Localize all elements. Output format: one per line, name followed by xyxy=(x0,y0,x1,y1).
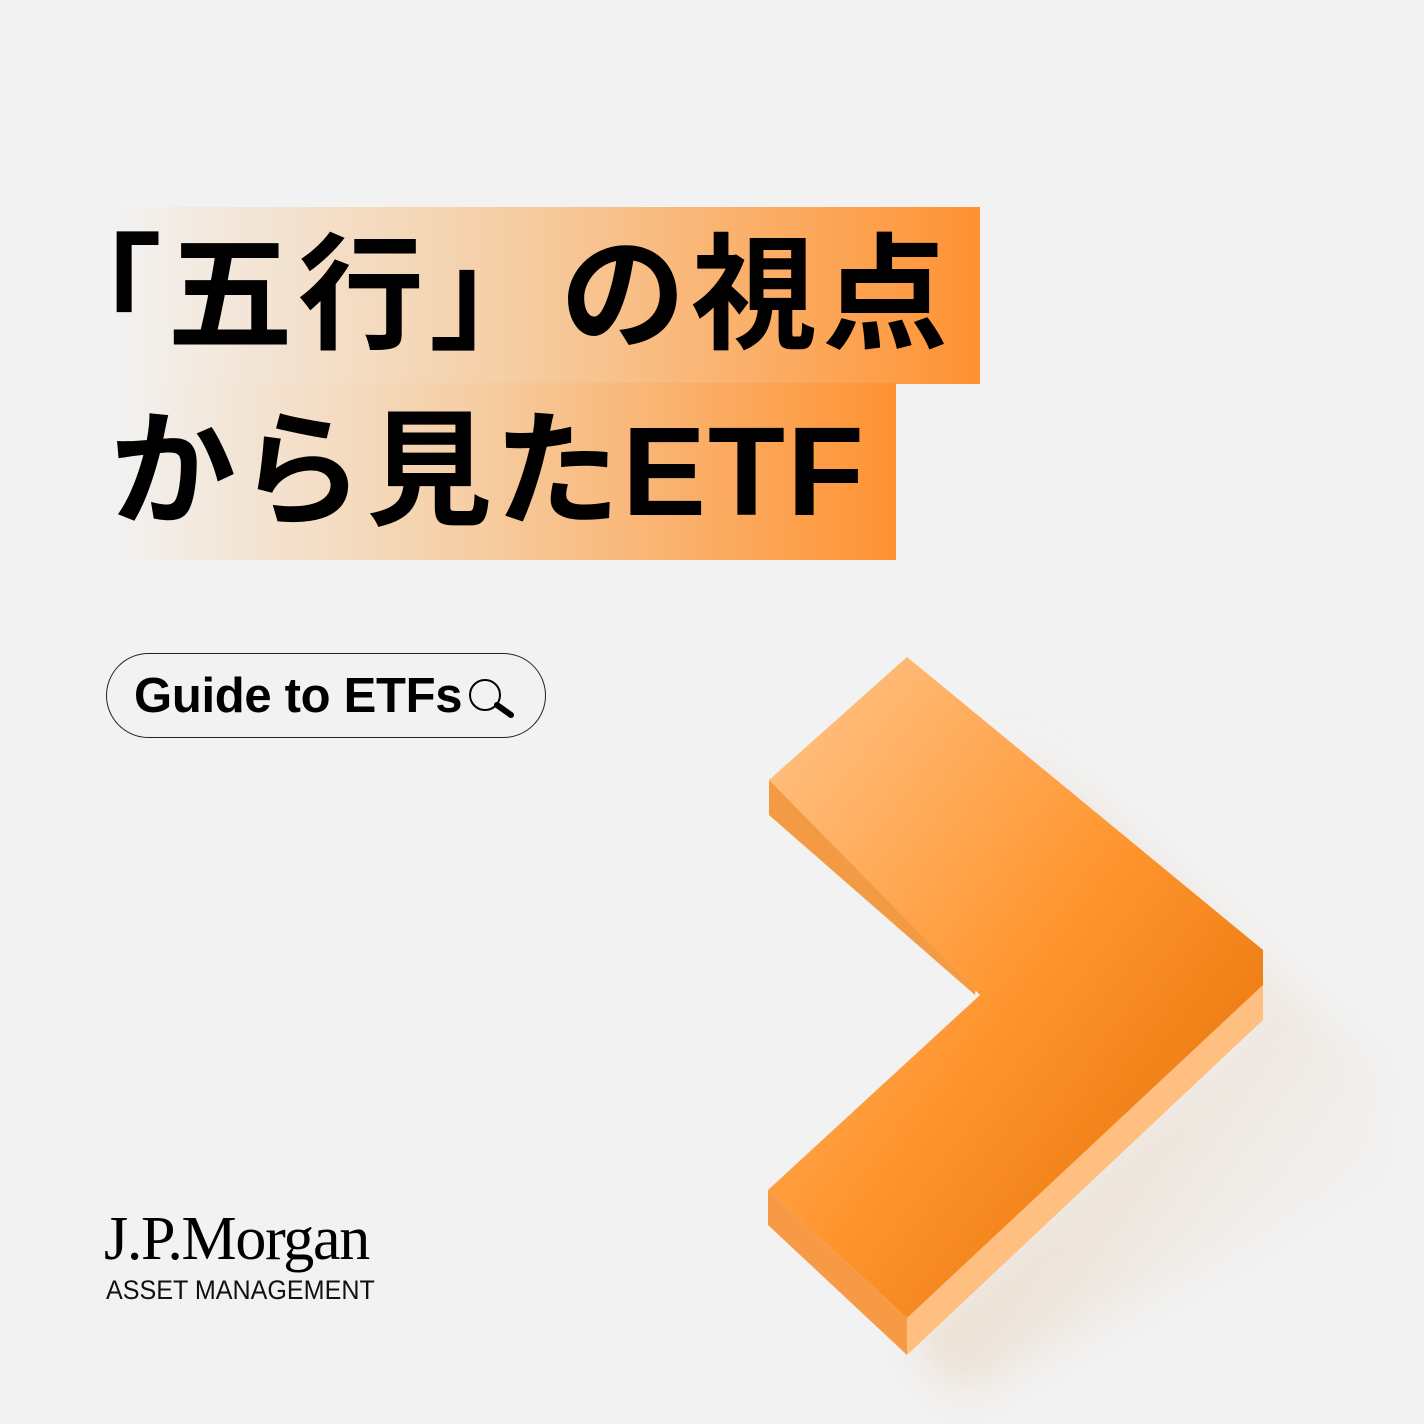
pill: Guide to ETFs xyxy=(106,653,546,738)
logo: J.P.Morgan Asset Management xyxy=(104,1205,375,1305)
icon: magnifier xyxy=(469,679,514,718)
title band row 2 xyxy=(110,383,896,560)
pill text: Guide to ETFs xyxy=(134,669,462,723)
title line 2: から見たETF xyxy=(110,401,866,542)
side faces xyxy=(769,780,980,995)
title band row 1 xyxy=(110,207,980,384)
logo subtitle: ASSET MANAGEMENT xyxy=(106,1275,375,1305)
logo wordmark: J.P.Morgan xyxy=(104,1205,369,1273)
shadow xyxy=(910,740,1380,1400)
title line 1: 「五行」の視点 xyxy=(36,225,953,366)
top face xyxy=(768,657,1263,1318)
